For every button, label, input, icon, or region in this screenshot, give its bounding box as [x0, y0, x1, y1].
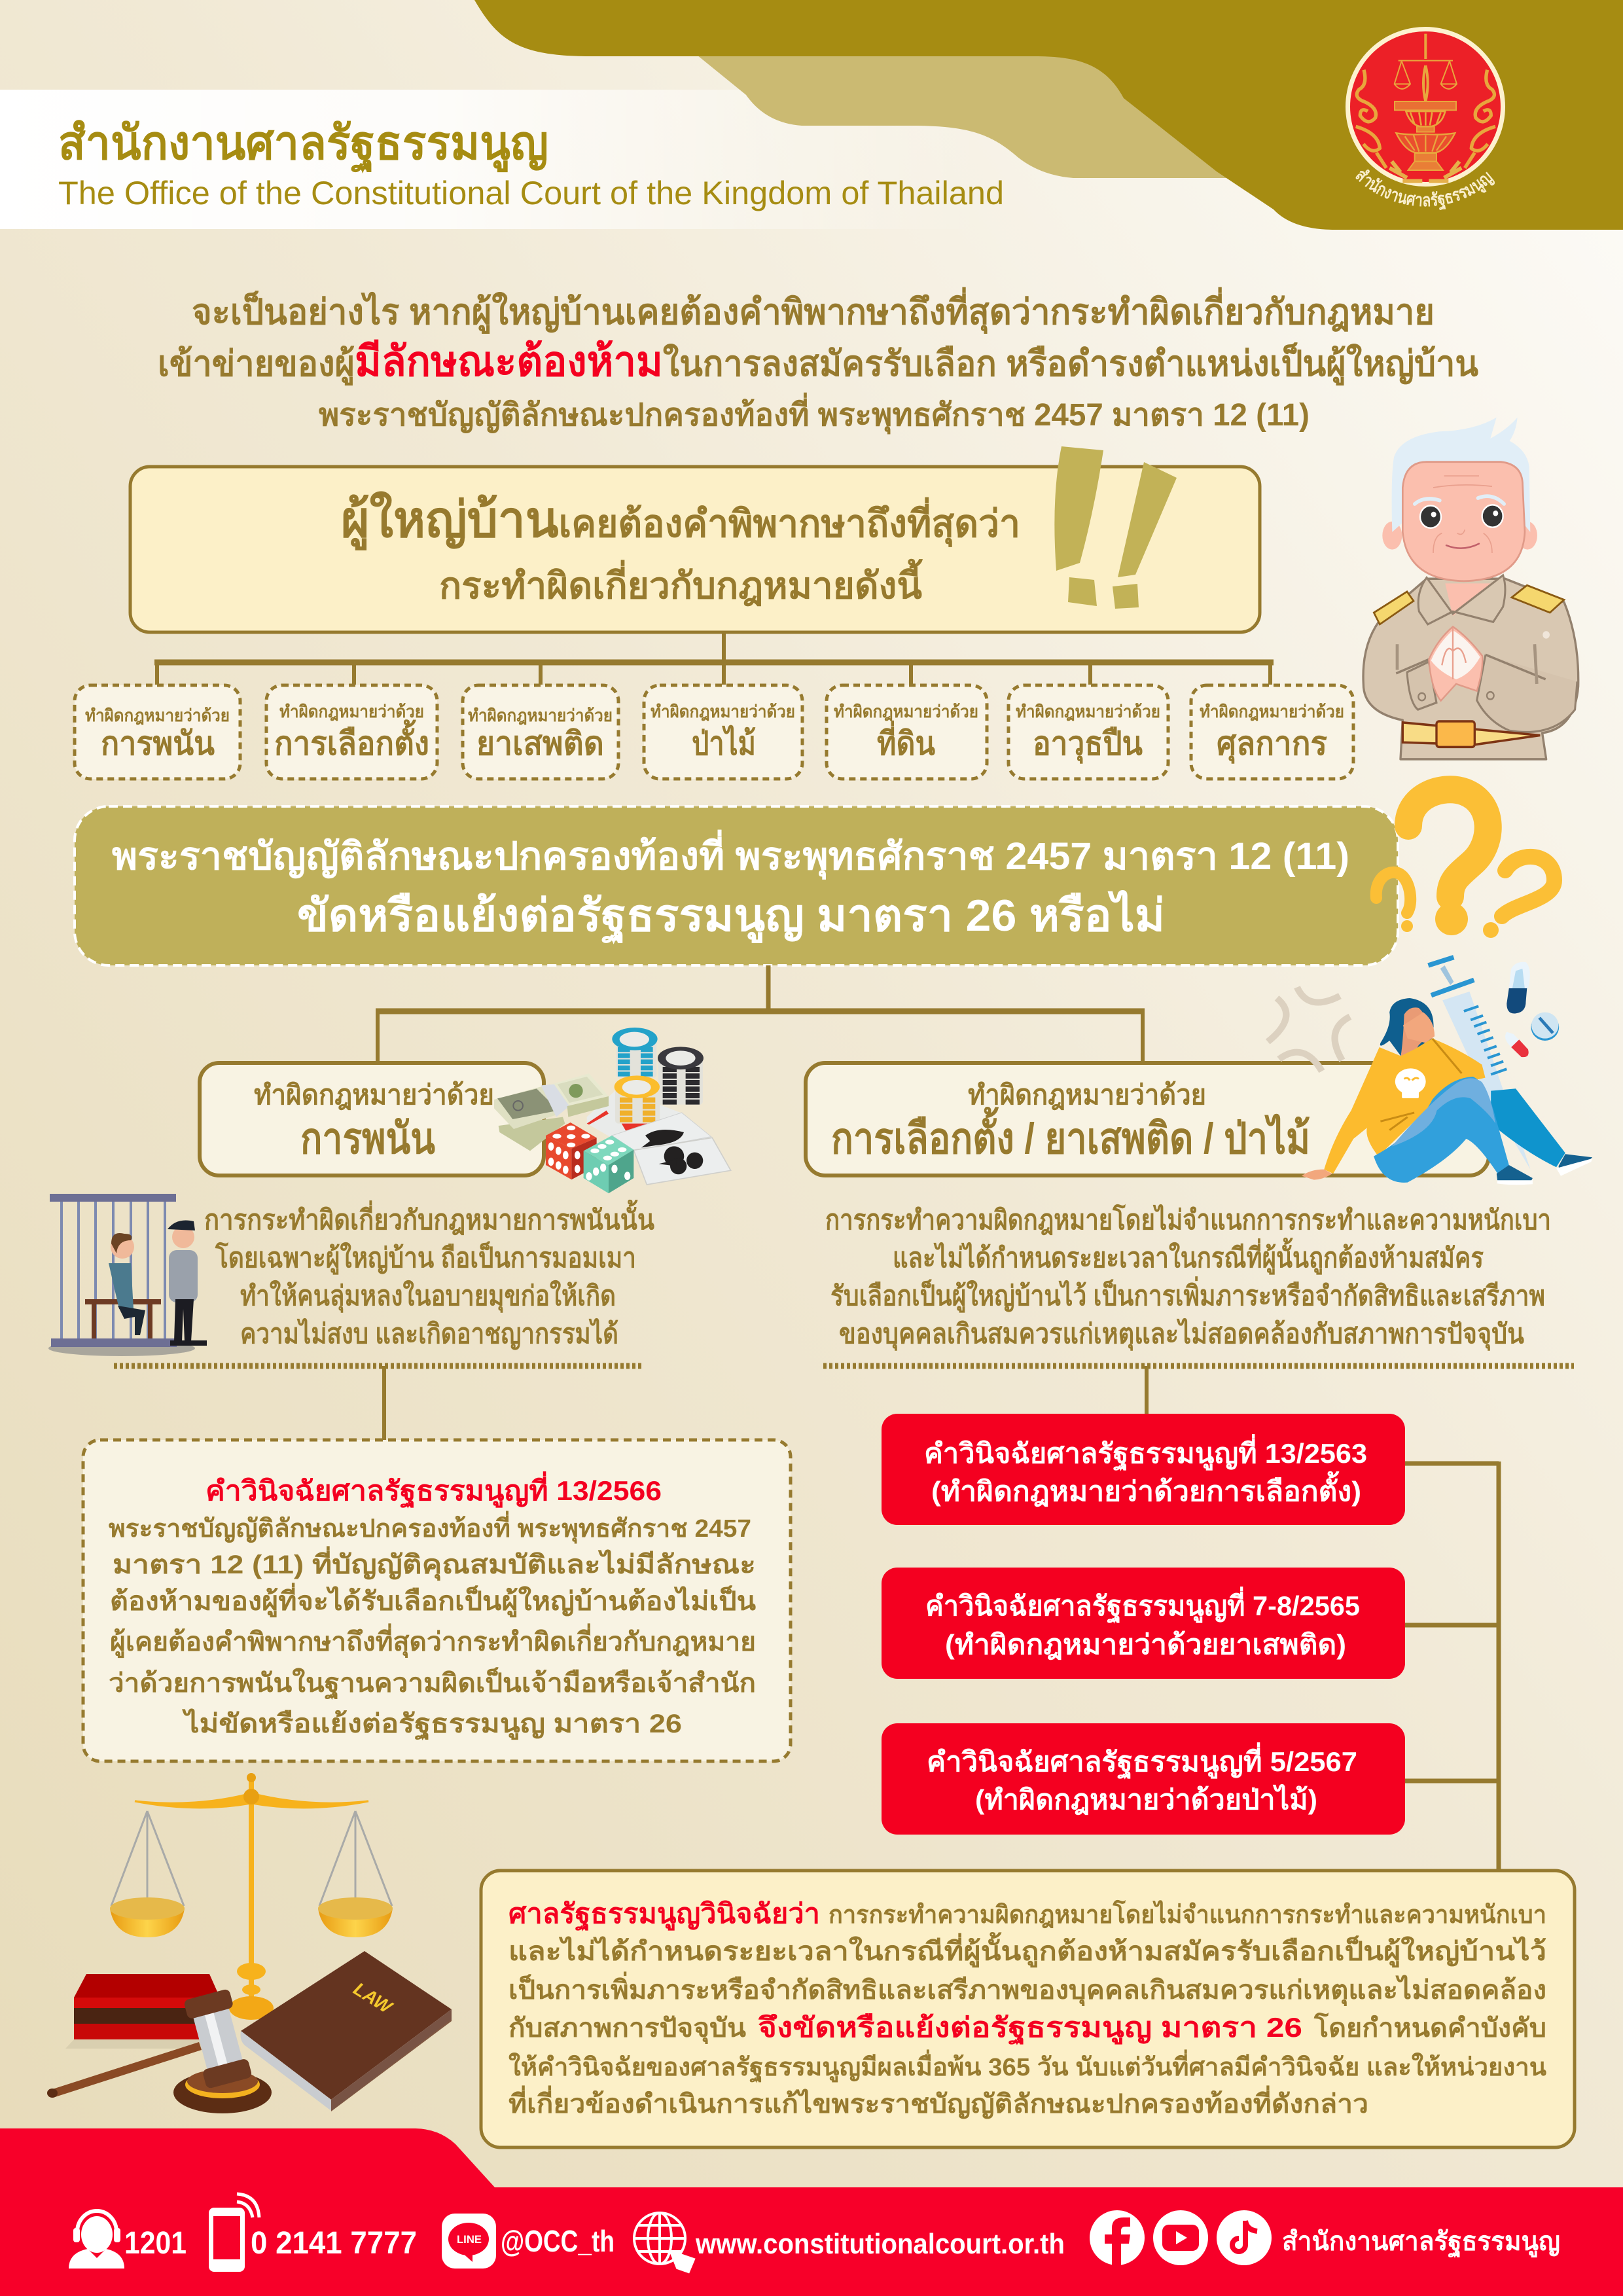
connector: rationale to rulings [384, 1366, 1147, 1440]
panel: court conclusion: เป็นการเพิ่มภาระหรือจำกัดสิทธิและเสรีภาพของบุคคลเกินสมควรแก่เหตุและไม่สอดคล้อง [508, 1971, 1546, 2007]
statement line 1: ผู้ใหญ่บ้านเคยต้องคำพิพากษาถึงที่สุดว่า [341, 491, 1020, 550]
icon: LINE: LINE [457, 2233, 482, 2246]
law box: narcotics: ทำผิดกฎหมายว่าด้วย [468, 706, 613, 725]
ruling body: มาตรา 12 (11) ที่บัญญัติคุณสมบัติและไม่มีลักษณะ [113, 1546, 756, 1581]
icon: LINE [442, 2214, 496, 2269]
emblem caption: สำนักงานศาลรัฐธรรมนูญ [1356, 170, 1495, 210]
red books [65, 1974, 229, 2049]
panel: court conclusion: และไม่ได้กำหนดระยะเวลาในกรณีที่ผู้นั้นถูกต้องห้ามสมัครรับเลือกเป็นผู้ใหญ่บ้านไว้ [508, 1932, 1546, 1967]
law box: gambling [75, 685, 240, 779]
text: gambling rationale: ความไม่สงบ และเกิดอาชญากรรมได้ [240, 1318, 618, 1350]
ruling button 7-8/2565 [882, 1568, 1405, 1679]
ruling button 5/2567: คำวินิจฉัยศาลรัฐธรรมนูญที่ 5/2567 [927, 1742, 1357, 1780]
ruling button 7-8/2565: คำวินิจฉัยศาลรัฐธรรมนูญที่ 7-8/2565 [925, 1587, 1360, 1624]
branch big heading: การเลือกตั้ง / ยาเสพติด / ป่าไม้ [831, 1106, 1310, 1162]
title line 3: legal reference: พระราชบัญญัติลักษณะปกครองท้องที่ พระพุทธศักราช 2457 มาตรา 12 (11) [319, 392, 1310, 435]
ruling button 13/2563: คำวินิจฉัยศาลรัฐธรรมนูญที่ 13/2563 [924, 1434, 1367, 1471]
law box: customs: ศุลกากร [1217, 725, 1327, 764]
panel: court conclusion [481, 1871, 1575, 2147]
law box: gambling: การพนัน [101, 725, 215, 762]
connector: statement to laws [154, 632, 1274, 685]
ruling button 7-8/2565: (ทำผิดกฎหมายว่าด้วยยาเสพติด) [945, 1629, 1346, 1660]
illustration: jail cell [48, 1194, 207, 1356]
icon: exclamation marks [1054, 446, 1177, 609]
header shapes [0, 0, 1623, 230]
illustration: distressed woman with drugs [1268, 958, 1592, 1185]
panel: court conclusion: การกระทำความผิดกฎหมายโดยไม่จำแนกการกระทำและความหนักเบา [829, 1899, 1546, 1929]
law box: forestry: ป่าไม้ [692, 725, 756, 762]
footer: hotline: 1201 [124, 2226, 187, 2261]
question line 1: พระราชบัญญัติลักษณะปกครองท้องที่ พระพุทธศักราช 2457 มาตรา 12 (11) [112, 829, 1349, 880]
guard [168, 1220, 207, 1346]
title block [158, 287, 1478, 435]
ruling button 13/2563: (ทำผิดกฎหมายว่าด้วยการเลือกตั้ง) [931, 1471, 1361, 1507]
law box: land [827, 685, 987, 779]
icon: web globe [634, 2213, 694, 2272]
panel: court conclusion: ที่เกี่ยวข้องดำเนินการแก้ไขพระราชบัญญัติลักษณะปกครองท้องที่ดังกล่าว [508, 2085, 1368, 2119]
law category boxes [75, 685, 1353, 779]
icon: TikTok [1217, 2210, 1272, 2265]
branch small heading: ทำผิดกฎหมายว่าด้วย [254, 1079, 494, 1110]
illustration: gambling items [494, 1028, 731, 1193]
scales of justice [110, 1773, 393, 2020]
law box: narcotics: ยาเสพติด [476, 725, 604, 762]
statement line 2: กระทำผิดเกี่ยวกับกฎหมายดังนี้ [439, 559, 923, 606]
law box: elections: ทำผิดกฎหมายว่าด้วย [279, 702, 424, 721]
panel: ruling 13/2566 [83, 1440, 791, 1761]
icon: Facebook [1090, 2210, 1145, 2265]
law box: customs [1191, 685, 1353, 779]
panel: court conclusion: จึงขัดหรือแย้งต่อรัฐธรรมนูญ มาตรา 26 [758, 2012, 1302, 2045]
footer: LINE handle: @OCC_th [501, 2224, 615, 2258]
title line 2: เข้าข่ายของผู้มีลักษณะต้องห้ามในการลงสมัครรับเลือก หรือดำรงตำแหน่งเป็นผู้ใหญ่บ้าน [158, 338, 1478, 386]
icon: call centre agent [69, 2211, 124, 2269]
law box: firearms [1008, 685, 1168, 779]
panel: court conclusion: โดยกำหนดคำบังคับ [1313, 2013, 1546, 2043]
text: gambling rationale: ทำให้คนลุ่มหลงในอบายมุขก่อให้เกิด [240, 1280, 616, 1313]
law box: land: ทำผิดกฎหมายว่าด้วย [834, 702, 978, 721]
icon: question marks [1376, 789, 1554, 938]
panel: court conclusion: ศาลรัฐธรรมนูญวินิจฉัยว่า [508, 1898, 820, 1931]
ruling button 5/2567: (ทำผิดกฎหมายว่าด้วยป่าไม้) [975, 1784, 1317, 1815]
header Thai name: สำนักงานศาลรัฐธรรมนูญ [58, 117, 548, 173]
text: gambling rationale: การกระทำผิดเกี่ยวกับกฎหมายการพนันนั้น [204, 1199, 654, 1235]
panel: constitutional question [75, 806, 1398, 965]
ruling title: คำวินิจฉัยศาลรัฐธรรมนูญที่ 13/2566 [205, 1471, 662, 1509]
law box: forestry [644, 685, 802, 779]
panel: gambling branch [200, 1063, 544, 1175]
text: other offences rationale: ของบุคคลเกินสมควรแก่เหตุและไม่สอดคล้องกับสภาพการปัจจุบัน [839, 1318, 1524, 1351]
text: other offences rationale: รับเลือกเป็นผู้ใหญ่บ้านไว้ เป็นการเพิ่มภาระหรือจำกัดสิทธิและเสรีภาพ [830, 1276, 1545, 1313]
text: other offences rationale: และไม่ได้กำหนดระยะเวลาในกรณีที่ผู้นั้นถูกต้องห้ามสมัคร [893, 1237, 1484, 1275]
ruling body: พระราชบัญญัติลักษณะปกครองท้องที่ พระพุทธศักราช 2457 [109, 1511, 751, 1544]
header English name: The Office of the Constitutional Court of the Kingdom of Thailand [58, 175, 1004, 211]
ruling body: ว่าด้วยการพนันในฐานความผิดเป็นเจ้ามือหรือเจ้าสำนัก [109, 1666, 756, 1700]
law box: elections: การเลือกตั้ง [274, 719, 429, 762]
icon: court emblem [1346, 27, 1505, 210]
branch small heading: ทำผิดกฎหมายว่าด้วย [968, 1079, 1206, 1110]
text: other offences rationale [825, 1204, 1551, 1351]
ruling body: ไม่ขัดหรือแย้งต่อรัฐธรรมนูญ มาตรา 26 [181, 1708, 682, 1741]
ruling body: ผู้เคยต้องคำพิพากษาถึงที่สุดว่ากระทำผิดเกี่ยวกับกฎหมาย [110, 1623, 756, 1659]
ruling body [109, 1511, 756, 1741]
law box: gambling: ทำผิดกฎหมายว่าด้วย [85, 706, 230, 725]
text: gambling rationale: โดยเฉพาะผู้ใหญ่บ้าน ถือเป็นการมอมเมา [215, 1241, 636, 1275]
branch big heading: การพนัน [300, 1114, 435, 1162]
connector: question to two branches [376, 965, 1145, 1063]
icon: YouTube [1153, 2210, 1208, 2265]
panel: court conclusion: กับสภาพการปัจจุบัน [508, 2014, 746, 2045]
ruling button 13/2563 [882, 1414, 1405, 1525]
title line 1: จะเป็นอย่างไร หากผู้ใหญ่บ้านเคยต้องคำพิพากษาถึงที่สุดว่ากระทำผิดเกี่ยวกับกฎหมาย [192, 287, 1435, 334]
panel: other offences branch [806, 1063, 1489, 1175]
illustration: village headman [1363, 418, 1578, 759]
law box: forestry: ทำผิดกฎหมายว่าด้วย [651, 702, 795, 721]
book label: LAW [350, 1979, 397, 2018]
header banner [0, 0, 1623, 230]
footer bar [0, 2128, 1623, 2296]
icon: mobile phone [209, 2194, 259, 2272]
law box: narcotics [463, 685, 618, 779]
illustration: scales, books and gavel [47, 1773, 452, 2113]
connector: rulings to conclusion [1405, 1462, 1499, 1871]
footer: office name: สำนักงานศาลรัฐธรรมนูญ [1282, 2227, 1560, 2259]
law book [240, 1951, 452, 2111]
gavel [47, 1988, 272, 2113]
panel: court conclusion: ให้คำวินิจฉัยของศาลรัฐธรรมนูญมีผลเมื่อพ้น 365 วัน นับแต่วันที่ศาลมีคำวินิจฉัย และให้หน่วยงาน [508, 2049, 1546, 2083]
panel: headman statement [130, 467, 1260, 632]
ruling body: ต้องห้ามของผู้ที่จะได้รับเลือกเป็นผู้ใหญ่บ้านต้องไม่เป็น [110, 1583, 756, 1617]
text: gambling rationale [204, 1199, 654, 1350]
law box: elections [266, 685, 437, 779]
jail bars [62, 1201, 165, 1338]
question line 2: ขัดหรือแย้งต่อรัฐธรรมนูญ มาตรา 26 หรือไม่ [297, 889, 1165, 944]
law box: land: ที่ดิน [877, 721, 935, 762]
ruling button 5/2567 [882, 1723, 1405, 1835]
law box: firearms: ทำผิดกฎหมายว่าด้วย [1016, 702, 1160, 721]
prisoner [109, 1233, 145, 1335]
law box: customs: ทำผิดกฎหมายว่าด้วย [1200, 702, 1344, 721]
footer: website: www.constitutionalcourt.or.th [695, 2228, 1065, 2260]
law box: firearms: อาวุธปืน [1033, 725, 1143, 764]
footer: phone number: 0 2141 7777 [251, 2226, 417, 2261]
